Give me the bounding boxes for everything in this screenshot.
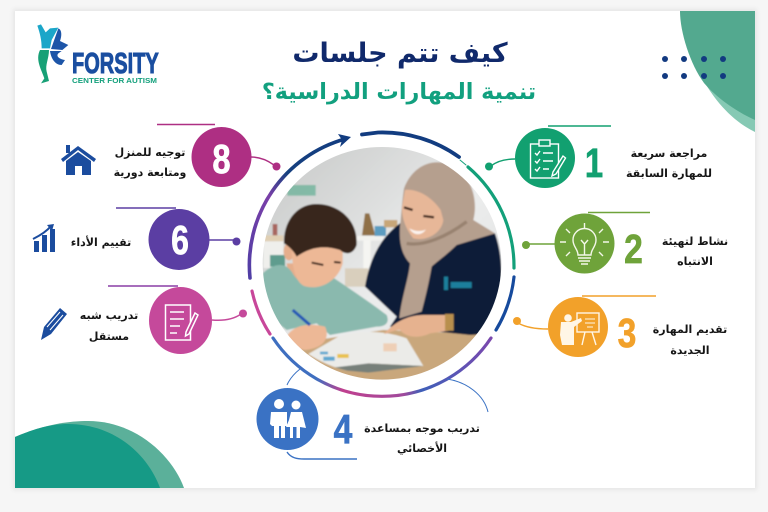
step 4 circle — [256, 388, 318, 450]
book — [308, 332, 423, 371]
logo tagline: CENTER FOR AUTISM — [72, 76, 157, 85]
ring: bottom gradient segment — [273, 338, 491, 396]
step 2 circle — [554, 214, 614, 274]
icon: house — [61, 145, 96, 175]
decoration: top-right teal shape — [680, 11, 755, 132]
step 4 bottom line — [287, 452, 357, 459]
ring: green right segment — [468, 167, 514, 268]
step 3 label: الجديدة — [670, 344, 710, 357]
step 1 label: للمهارة السابقة — [626, 167, 712, 180]
step 4 connector — [287, 369, 300, 385]
logo icon — [37, 24, 68, 83]
woman's smile — [409, 228, 426, 234]
step 8 — [61, 124, 280, 187]
ring: purple and navy segment with arrow — [249, 139, 345, 278]
step 6 circle — [148, 209, 210, 270]
logo wordmark: FORSITY — [72, 47, 159, 80]
ring: green thin tick — [460, 160, 466, 165]
icon: teacher at board — [560, 313, 599, 345]
shelves — [263, 235, 283, 241]
step 1 connector — [491, 159, 515, 166]
step 4 arc line — [447, 379, 488, 412]
step 3 connector end — [513, 317, 521, 325]
step 4 — [256, 369, 488, 459]
table — [300, 329, 478, 380]
scarf fold — [407, 222, 467, 244]
step 2 connector — [527, 243, 555, 245]
ring: navy top segment — [362, 132, 459, 157]
step 5 label: مستقل — [89, 330, 129, 343]
woman's face — [402, 190, 443, 239]
step 1 label: مراجعة سريعة — [631, 147, 707, 160]
decoration: bottom-left teal shape — [15, 421, 184, 488]
step 2 top line — [588, 212, 650, 214]
step 5 connector end — [239, 310, 247, 318]
icon: clipboard — [530, 140, 566, 178]
step 3 top line — [582, 295, 656, 297]
step 6 number: 6 — [171, 217, 189, 263]
ring arrowhead — [338, 134, 351, 147]
title line 1: كيف تتم جلسات — [292, 38, 508, 69]
icon: writing page — [166, 305, 198, 340]
step 8 label: ومتابعة دورية — [114, 166, 187, 179]
step 2 — [522, 212, 728, 274]
boy's neck — [286, 262, 298, 280]
icon: two children — [270, 399, 306, 438]
step 8 number: 8 — [212, 135, 231, 182]
step 3 circle — [548, 297, 608, 357]
step 1 top line — [548, 125, 611, 127]
step 5 connector — [212, 314, 241, 320]
step 2 label: نشاط لتهيئة — [662, 235, 728, 248]
step 8 connector — [251, 157, 274, 165]
boy's hand and pencil — [287, 325, 327, 350]
icon: light bulb — [560, 223, 609, 264]
boy's shirt — [263, 265, 388, 335]
step 3 connector — [518, 323, 548, 329]
boy's hair — [284, 204, 357, 257]
logo — [37, 24, 159, 85]
step 5 circle — [149, 287, 212, 354]
step 8 label: توجيه للمنزل — [115, 146, 185, 159]
step 6 — [33, 208, 240, 270]
circular arrow ring — [249, 132, 514, 396]
step 5 top line — [108, 285, 178, 287]
step 5 label: تدريب شبه — [80, 309, 138, 322]
boy's face — [292, 243, 343, 287]
woman's hand — [384, 315, 453, 337]
step 1 circle — [515, 128, 575, 188]
title line 2: تنمية المهارات الدراسية؟ — [262, 79, 536, 105]
icon: chart — [33, 224, 55, 252]
decoration: dot grid — [662, 56, 726, 79]
step 1 connector end — [485, 162, 493, 170]
scarf — [399, 162, 495, 318]
step 1 number: 1 — [585, 139, 603, 186]
woman's jacket — [365, 223, 501, 335]
step 4 number: 4 — [334, 406, 352, 452]
step 6 label: تقييم الأداء — [71, 235, 131, 249]
step 8 connector end — [272, 162, 280, 170]
title — [262, 38, 536, 105]
step 6 connector — [209, 239, 234, 241]
step 1 — [485, 126, 712, 188]
ring: pink left segment — [252, 291, 270, 334]
step 2 label: الانتباه — [677, 255, 713, 268]
boy's eyes — [312, 262, 341, 265]
step 6 top line — [116, 207, 176, 209]
step 8 circle — [192, 127, 252, 187]
step 4 label: الأخصائي — [397, 441, 447, 455]
wall sign — [287, 185, 316, 196]
ring: blue right segment — [496, 277, 514, 330]
step 6 connector end — [232, 238, 240, 246]
logo on jacket — [444, 277, 472, 290]
step 3 label: تقديم المهارة — [653, 323, 727, 336]
central photo — [250, 143, 507, 383]
step 2 connector end — [522, 241, 530, 249]
icon: pencil — [41, 308, 67, 340]
step 2 number: 2 — [624, 226, 643, 272]
boy's ear — [284, 243, 294, 260]
step 3 number: 3 — [618, 310, 636, 356]
woman's eyes — [404, 207, 434, 217]
step 3 — [513, 296, 727, 357]
step 8 top line — [157, 124, 215, 126]
step 5 — [41, 286, 247, 354]
step 4 label: تدريب موجه بمساعدة — [364, 422, 480, 435]
